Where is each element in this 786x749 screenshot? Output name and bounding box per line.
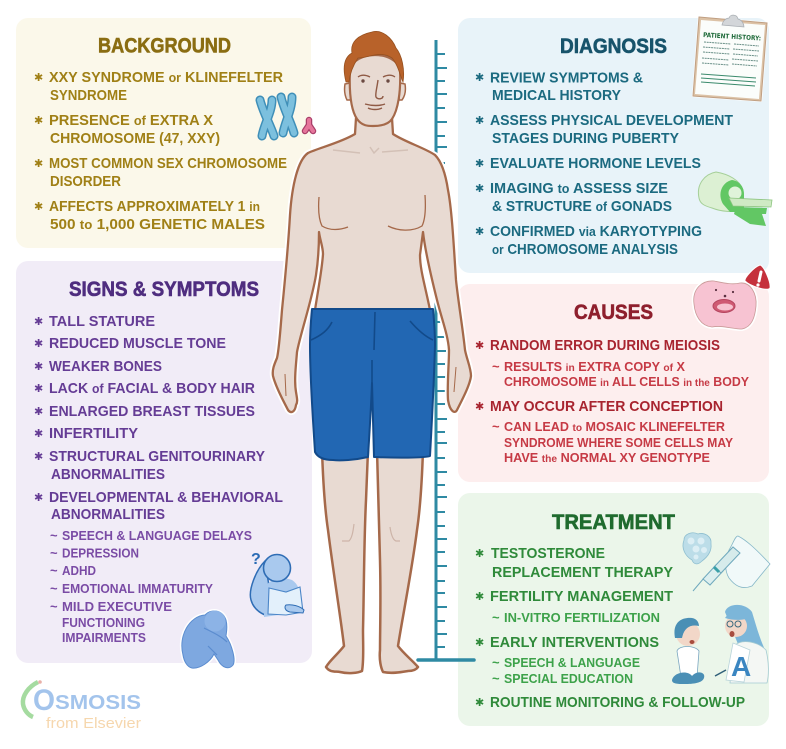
panel: diagnosis [458, 15, 772, 273]
signs sub-list: ~ [50, 563, 58, 578]
leg details [342, 524, 400, 541]
signs sub-list: EMOTIONAL IMMATURITY [62, 581, 213, 596]
causes list: CAN LEAD to MOSAIC KLINEFELTER [504, 419, 726, 434]
signs sub-list: ~ [50, 546, 58, 560]
panel: causes [458, 265, 770, 482]
causes list [475, 337, 749, 465]
signs list: ✱ [34, 427, 43, 440]
panel: signs and symptoms [16, 261, 312, 668]
logo: Osmosis from Elsevier: from Elsevier [46, 715, 141, 732]
background list: DISORDER [50, 173, 121, 190]
chest details [285, 147, 456, 396]
heading: diagnosis: DIAGNOSIS [560, 35, 667, 58]
diagnosis list: & STRUCTURE of GONADS [492, 198, 672, 215]
background list: MOST COMMON SEX CHROMOSOME [49, 155, 287, 172]
treatment list: SPEECH & LANGUAGE [504, 655, 640, 670]
signs sub-list: ~ [50, 599, 58, 614]
background list: 500 to 1,000 GENETIC MALES [50, 216, 265, 233]
signs list: INFERTILITY [49, 425, 138, 442]
diagnosis list: STAGES DURING PUBERTY [492, 130, 679, 147]
treatment list: ✱ [475, 590, 484, 603]
background list: ✱ [34, 114, 43, 127]
signs sub-list: FUNCTIONING [62, 615, 145, 630]
signs sub-list: ADHD [62, 563, 96, 578]
diagnosis list: ✱ [475, 225, 484, 238]
logo: Osmosis from Elsevier: SMOSIS [55, 692, 141, 714]
torso and arms [273, 118, 471, 412]
signs list: ✱ [34, 405, 43, 418]
diagnosis list: or CHROMOSOME ANALYSIS [492, 241, 678, 258]
background list: CHROMOSOME (47, XXY) [50, 130, 220, 147]
treatment list: EARLY INTERVENTIONS [490, 634, 659, 651]
heading: causes: CAUSES [574, 301, 653, 324]
diagnosis list: ✱ [475, 114, 484, 127]
diagnosis list: ✱ [475, 157, 484, 170]
background list: XXY SYNDROME or KLINEFELTER [49, 69, 283, 86]
treatment list: SPECIAL EDUCATION [504, 671, 633, 686]
causes list: CHROMOSOME in ALL CELLS in the BODY [504, 374, 749, 389]
head [344, 31, 405, 126]
treatment list: REPLACEMENT THERAPY [492, 564, 673, 581]
signs list: ABNORMALITIES [51, 506, 165, 523]
icon: reading person with question mark: ? [251, 551, 261, 568]
height ruler [418, 40, 474, 660]
treatment list: ✱ [475, 547, 484, 560]
signs list: ✱ [34, 337, 43, 350]
heading: background: BACKGROUND [98, 34, 231, 58]
icon: reading person with question mark [250, 551, 304, 617]
treatment list [475, 545, 745, 711]
background list: SYNDROME [50, 87, 127, 104]
icon: hand with syringe [693, 536, 770, 591]
diagnosis list: IMAGING to ASSESS SIZE [490, 180, 668, 197]
diagnosis list: ✱ [475, 182, 484, 195]
signs list: WEAKER BONES [49, 358, 162, 375]
signs list: ✱ [34, 450, 43, 463]
treatment list: ~ [492, 610, 500, 625]
legs [322, 450, 423, 673]
signs sub-list: ~ [50, 528, 58, 543]
causes list: MAY OCCUR AFTER CONCEPTION [490, 398, 723, 415]
human figure [273, 31, 471, 673]
signs sub-list: SPEECH & LANGUAGE DELAYS [62, 528, 252, 543]
causes list: ✱ [475, 339, 484, 352]
treatment list: ROUTINE MONITORING & FOLLOW-UP [490, 694, 745, 711]
icon: clipboard patient history: PATIENT HISTORY: [703, 31, 761, 43]
diagnosis list: EVALUATE HORMONE LEVELS [490, 155, 701, 172]
icon: MRI scanner [698, 172, 772, 226]
diagnosis list [475, 70, 733, 258]
signs list: ✱ [34, 382, 43, 395]
treatment list: FERTILITY MANAGEMENT [490, 588, 673, 605]
treatment list: IN-VITRO FERTILIZATION [504, 610, 660, 625]
heading: signs and symptoms: SIGNS & SYMPTOMS [69, 278, 259, 301]
icon: worried pink cell [694, 281, 756, 329]
signs list: REDUCED MUSCLE TONE [49, 335, 226, 352]
icon: teacher with letter card [715, 605, 768, 683]
signs list: ✱ [34, 491, 43, 504]
diagnosis list: MEDICAL HISTORY [492, 87, 621, 104]
panel: treatment [458, 493, 770, 726]
signs list: ✱ [34, 360, 43, 373]
signs sub-list: MILD EXECUTIVE [62, 599, 172, 614]
treatment list: ~ [492, 655, 500, 670]
signs sub-list [50, 528, 252, 645]
icon: sitting person hugging knees [182, 610, 234, 668]
shorts [310, 309, 435, 460]
treatment list: ✱ [475, 696, 484, 709]
background list [34, 69, 287, 233]
signs list: STRUCTURAL GENITOURINARY [49, 448, 265, 465]
signs sub-list: IMPAIRMENTS [62, 630, 146, 645]
background list: ✱ [34, 71, 43, 84]
icon: chromosomes [260, 97, 313, 136]
icon: clipboard patient history [692, 15, 768, 102]
treatment list: TESTOSTERONE [491, 545, 605, 562]
treatment list: ✱ [475, 636, 484, 649]
causes list: ~ [492, 419, 500, 434]
background list: AFFECTS APPROXIMATELY 1 in [49, 198, 260, 215]
signs sub-list: ~ [50, 581, 58, 596]
signs list: ABNORMALITIES [51, 466, 165, 483]
signs list: LACK of FACIAL & BODY HAIR [49, 380, 255, 397]
diagnosis list: REVIEW SYMPTOMS & [490, 70, 643, 86]
causes list: RANDOM ERROR DURING MEIOSIS [490, 337, 720, 354]
background list: ✱ [34, 157, 43, 170]
causes list: HAVE the NORMAL XY GENOTYPE [504, 450, 710, 465]
icon: child sitting [672, 618, 704, 684]
signs sub-list: DEPRESSION [62, 546, 139, 560]
icon: testosterone molecule cloud [683, 533, 711, 564]
causes list: ~ [492, 359, 500, 374]
diagnosis list: ASSESS PHYSICAL DEVELOPMENT [490, 112, 733, 129]
signs list: TALL STATURE [49, 313, 155, 330]
icon: alert triangle [745, 265, 770, 289]
background list: PRESENCE of EXTRA X [49, 112, 213, 129]
signs list [34, 313, 283, 523]
causes list: SYNDROME WHERE SOME CELLS MAY [504, 435, 733, 450]
signs list: ✱ [34, 315, 43, 328]
diagnosis list: CONFIRMED via KARYOTYPING [490, 223, 702, 240]
panel: background [16, 18, 313, 248]
signs list: DEVELOPMENTAL & BEHAVIORAL [49, 489, 283, 506]
signs list: ENLARGED BREAST TISSUES [49, 403, 255, 420]
logo: Osmosis from Elsevier [23, 680, 141, 732]
causes list: ✱ [475, 400, 484, 413]
logo: Osmosis from Elsevier: O [33, 684, 55, 717]
background list: ✱ [34, 200, 43, 213]
causes list: RESULTS in EXTRA COPY of X [504, 359, 685, 374]
treatment list: ~ [492, 671, 500, 686]
diagnosis list: ✱ [475, 71, 484, 84]
icon: teacher with letter card: A [731, 651, 751, 682]
heading: treatment: TREATMENT [552, 511, 675, 534]
